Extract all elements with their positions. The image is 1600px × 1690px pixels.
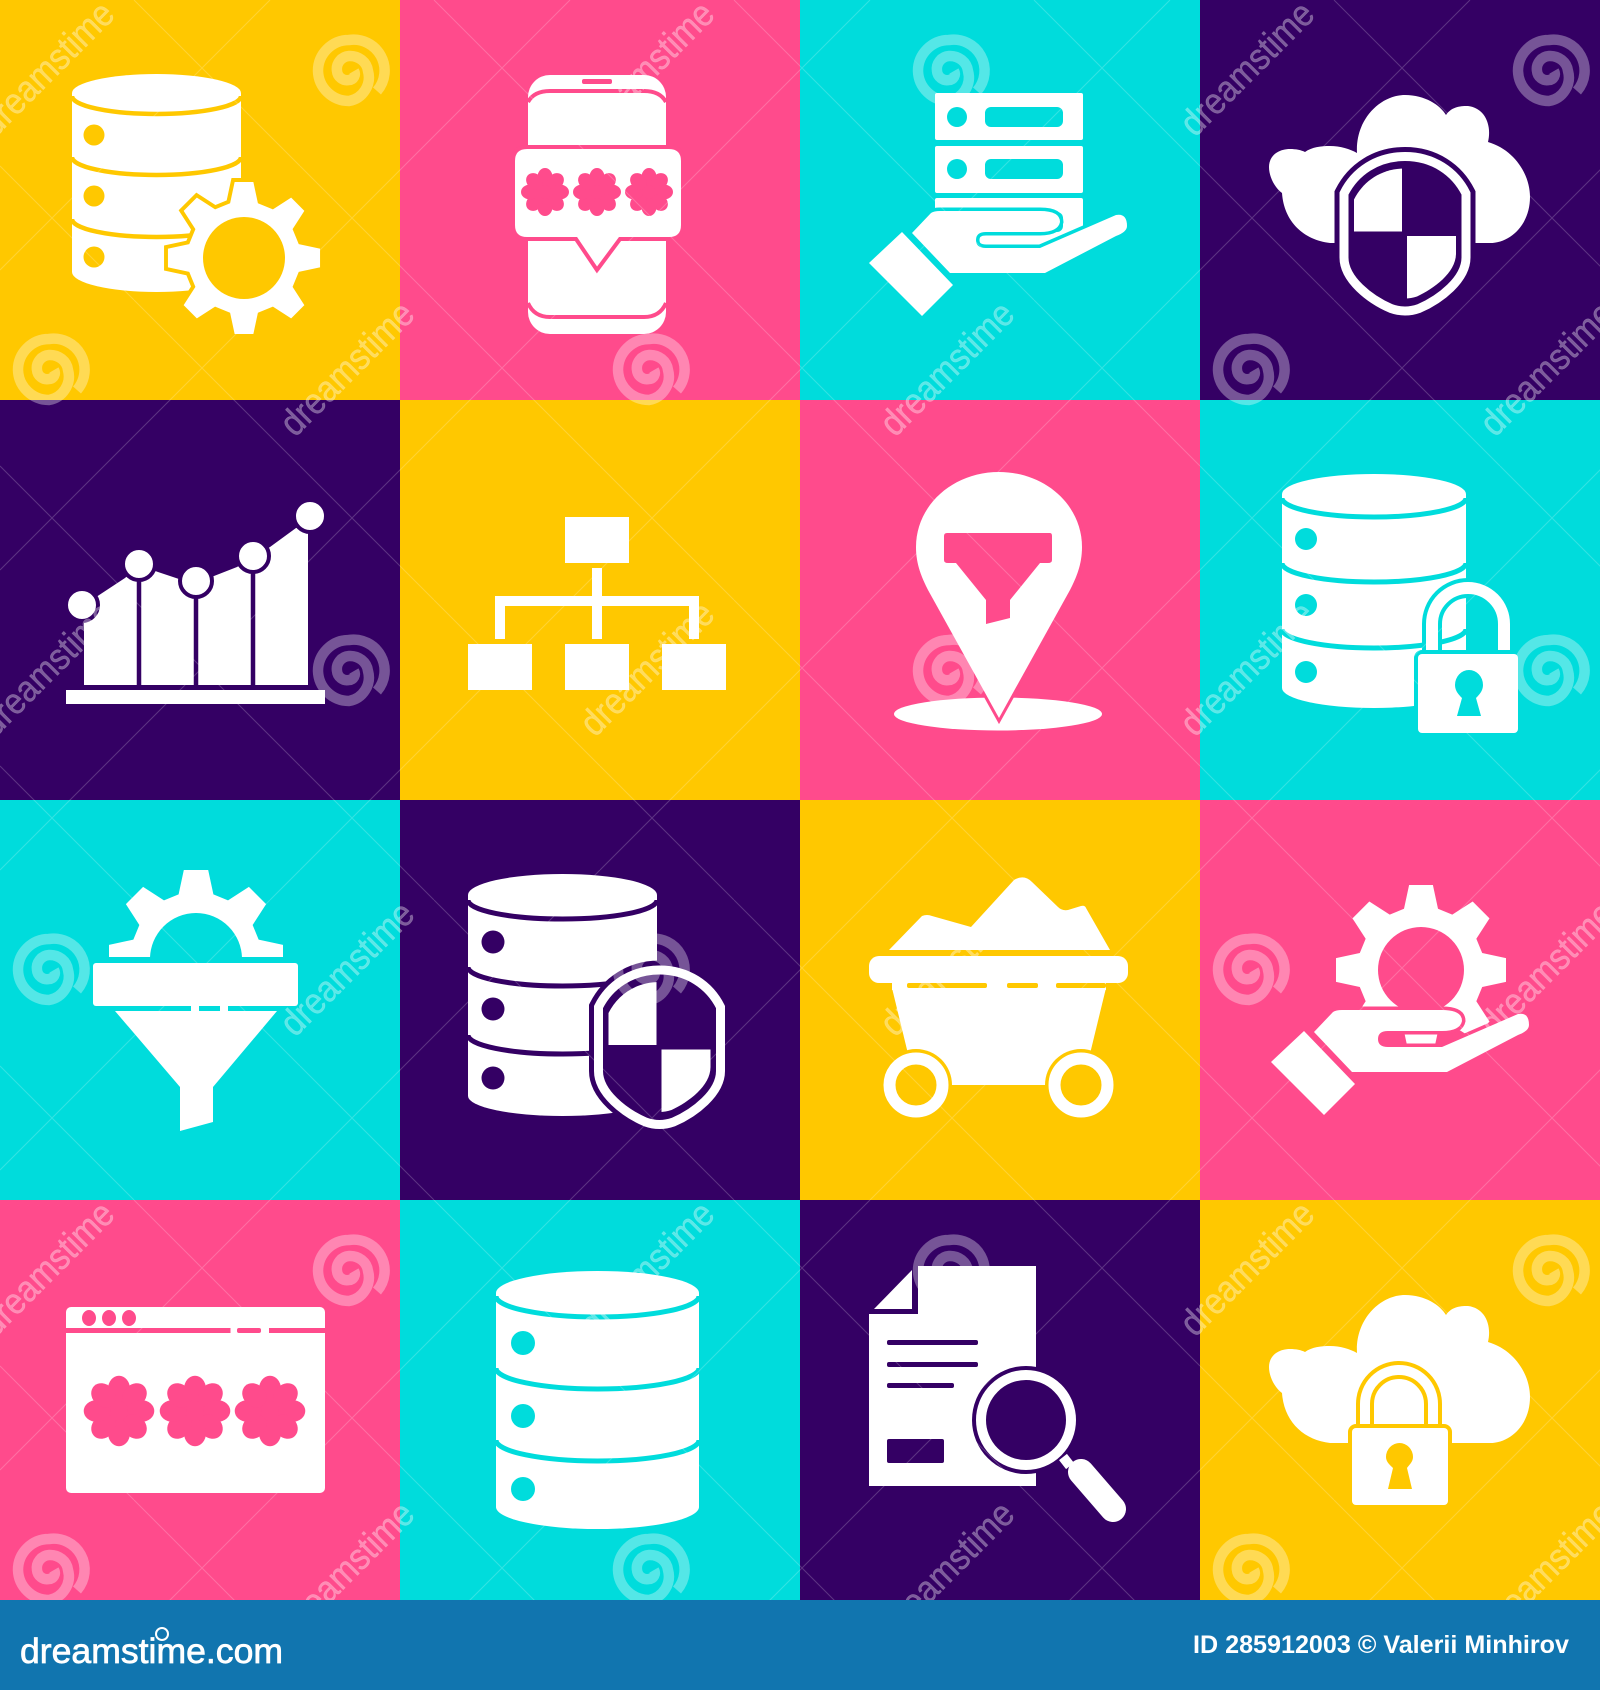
- watermark: diagonal dreamstime text: dreamstime: [272, 1493, 422, 1644]
- icon: browser window: [66, 1307, 325, 1493]
- watermark: diagonal dreamstime text: dreamstime: [572, 593, 722, 744]
- panel: cloud with shield: [1200, 0, 1600, 400]
- footer logo spiral: [156, 1628, 168, 1640]
- icon: smartphone: [528, 75, 666, 334]
- icon: database cylinder: [1282, 474, 1466, 708]
- watermark: diagonal dreamstime text: dreamstime: [872, 293, 1022, 444]
- panel: document search: [800, 1200, 1200, 1600]
- panel: funnel with gear: [0, 800, 400, 1200]
- icon: server stack: [935, 93, 1083, 250]
- icon: padlock: [1418, 588, 1518, 733]
- footer image credit: ID 285912003 © Valerii Minhirov: [1193, 1631, 1569, 1659]
- chart: rising area with points: [66, 500, 326, 704]
- panel: database: [400, 1200, 800, 1600]
- icon: cloud: [1269, 1295, 1530, 1443]
- icon: document: [869, 1266, 1036, 1486]
- panel: gear on hand: [1200, 800, 1600, 1200]
- icon: cart body: [869, 956, 1128, 1085]
- icon: organization chart: [468, 517, 726, 690]
- icon: database cylinder: [468, 874, 657, 1116]
- icon: gear: [166, 180, 322, 336]
- icon: map pin: [916, 472, 1082, 718]
- watermark: diagonal dreamstime text: dreamstime: [572, 1193, 722, 1344]
- panel: database with shield: [400, 800, 800, 1200]
- icon: magnifying glass: [972, 1366, 1113, 1509]
- watermark: diagonal dreamstime text: dreamstime: [272, 293, 422, 444]
- footer logo text: dreamstime.com: [20, 1632, 283, 1671]
- panel: line area chart: [0, 400, 400, 800]
- panel: browser window password: [0, 1200, 400, 1600]
- panel: smartphone password: [400, 0, 800, 400]
- icon: gear: [1336, 885, 1506, 1055]
- icon: ground ellipse: [894, 698, 1102, 730]
- panel: server on hand: [800, 0, 1200, 400]
- panel: cloud with padlock: [1200, 1200, 1600, 1600]
- icon: database cylinder: [72, 74, 241, 292]
- icon: open hand: [1271, 1010, 1529, 1115]
- icon: half gear: [109, 870, 283, 957]
- footer bar: [0, 1600, 1600, 1690]
- icon: cloud: [1269, 95, 1530, 243]
- icon: open hand: [869, 211, 1127, 316]
- icon: password speech bubble: [513, 147, 683, 270]
- panel: hierarchy diagram: [400, 400, 800, 800]
- panel: database with gear: [0, 0, 400, 400]
- icon: database cylinder: [496, 1271, 699, 1529]
- watermark: diagonal dreamstime text: dreamstime: [872, 893, 1022, 1044]
- watermark: diagonal dreamstime text: dreamstime: [872, 1493, 1022, 1644]
- icon: funnel cut-out: [944, 533, 1052, 624]
- watermark: diagonal dreamstime text: dreamstime: [1172, 1193, 1322, 1344]
- panel: mine cart: [800, 800, 1200, 1200]
- icon: ore pile: [889, 877, 1110, 950]
- icon: shield: [1344, 156, 1466, 311]
- panel: location pin with funnel: [800, 400, 1200, 800]
- icon: funnel: [93, 963, 298, 1131]
- watermark: diagonal dreamstime text: dreamstime: [1172, 593, 1322, 744]
- panel: database with padlock: [1200, 400, 1600, 800]
- icon: padlock: [1352, 1370, 1448, 1505]
- icon: shield: [598, 970, 720, 1124]
- icon: password asterisks: [84, 1376, 305, 1446]
- icon: cart wheels: [880, 1049, 1117, 1121]
- watermark: diagonal dreamstime text: dreamstime: [272, 893, 422, 1044]
